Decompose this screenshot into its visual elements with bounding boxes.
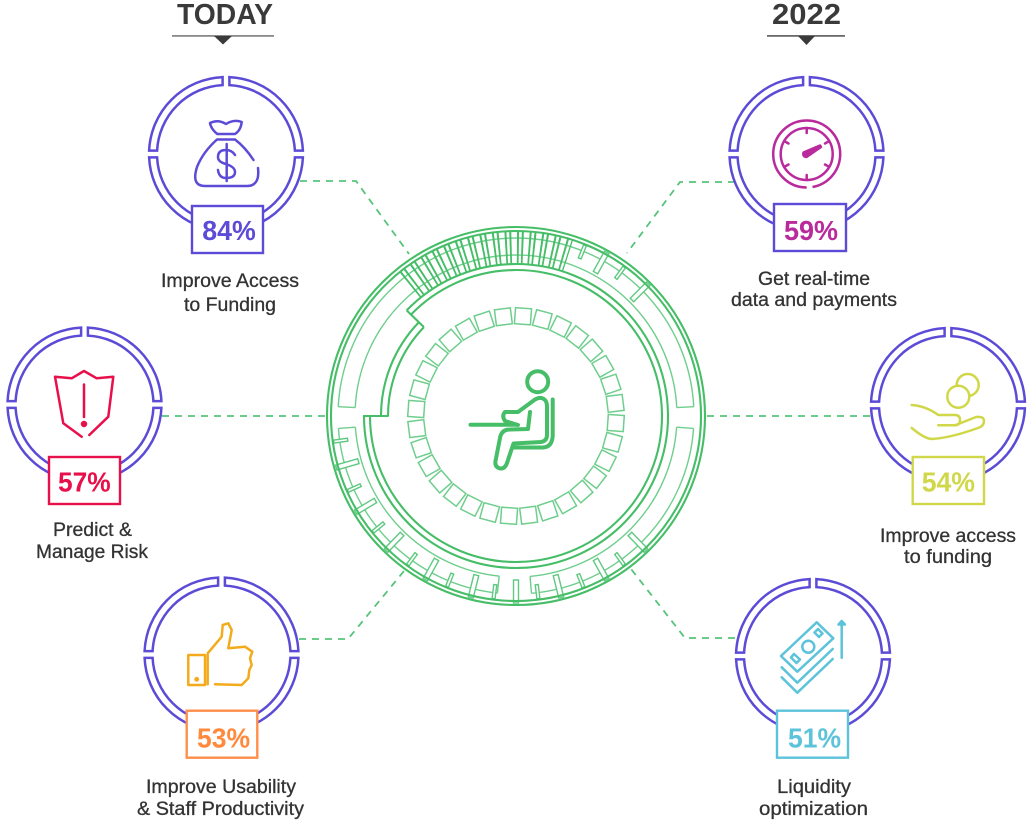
panel: Predict and Manage Risk 57% — [8, 328, 161, 563]
panel: Liquidity optimization 51% — [736, 579, 890, 820]
icon: gauge — [773, 120, 840, 188]
label: & Staff Productivity — [137, 799, 305, 820]
percentage box — [777, 711, 848, 758]
icon: hand with coins — [912, 374, 984, 439]
percentage box: 51% — [788, 723, 841, 754]
label: Predict & — [53, 520, 132, 541]
icon: money stack with arrow — [781, 621, 845, 693]
panel: Improve Access to Funding 84% — [149, 77, 303, 316]
percentage box: 59% — [784, 215, 838, 246]
icon: seated person at desk — [470, 371, 553, 469]
label: Liquidity — [777, 777, 852, 798]
icon: thumbs up — [188, 623, 252, 685]
dense radial bars — [410, 247, 568, 285]
stepped inner double ring — [301, 201, 731, 631]
percentage box: 54% — [922, 467, 975, 498]
label: Improve Access — [161, 271, 299, 292]
label: Manage Risk — [36, 542, 148, 563]
percentage box: 84% — [202, 215, 256, 246]
central circular diagram — [301, 201, 731, 631]
label: to Funding — [184, 295, 276, 316]
label: Improve access — [880, 526, 1016, 547]
percentage box — [774, 204, 846, 251]
upper thin band — [329, 229, 703, 603]
dashed connectors — [162, 181, 870, 639]
panel: Improve Usability and Staff Productivity 53% — [137, 578, 305, 820]
lower left thin band — [320, 220, 712, 612]
percentage box: 57% — [58, 467, 111, 498]
icon: shield — [55, 371, 113, 437]
heading: 2022 — [767, 0, 845, 45]
percentage box — [187, 711, 257, 758]
label: Get real-time — [758, 269, 870, 290]
lower right thin band — [326, 226, 706, 606]
icon: money bag — [195, 121, 258, 186]
percentage box: 53% — [197, 723, 250, 754]
heading: TODAY — [172, 0, 274, 44]
label: to funding — [904, 547, 992, 568]
label: data and payments — [731, 290, 897, 311]
outer double ring — [327, 227, 705, 605]
tick marks — [334, 245, 650, 603]
percentage box — [192, 206, 263, 253]
ring of small squares — [408, 308, 624, 524]
label: optimization — [759, 799, 868, 820]
panel: Improve access to funding 54% — [871, 328, 1025, 568]
percentage box — [913, 457, 984, 504]
label: Improve Usability — [146, 777, 297, 798]
panel: Get real-time data and payments 59% — [730, 77, 897, 311]
percentage box — [49, 457, 120, 504]
